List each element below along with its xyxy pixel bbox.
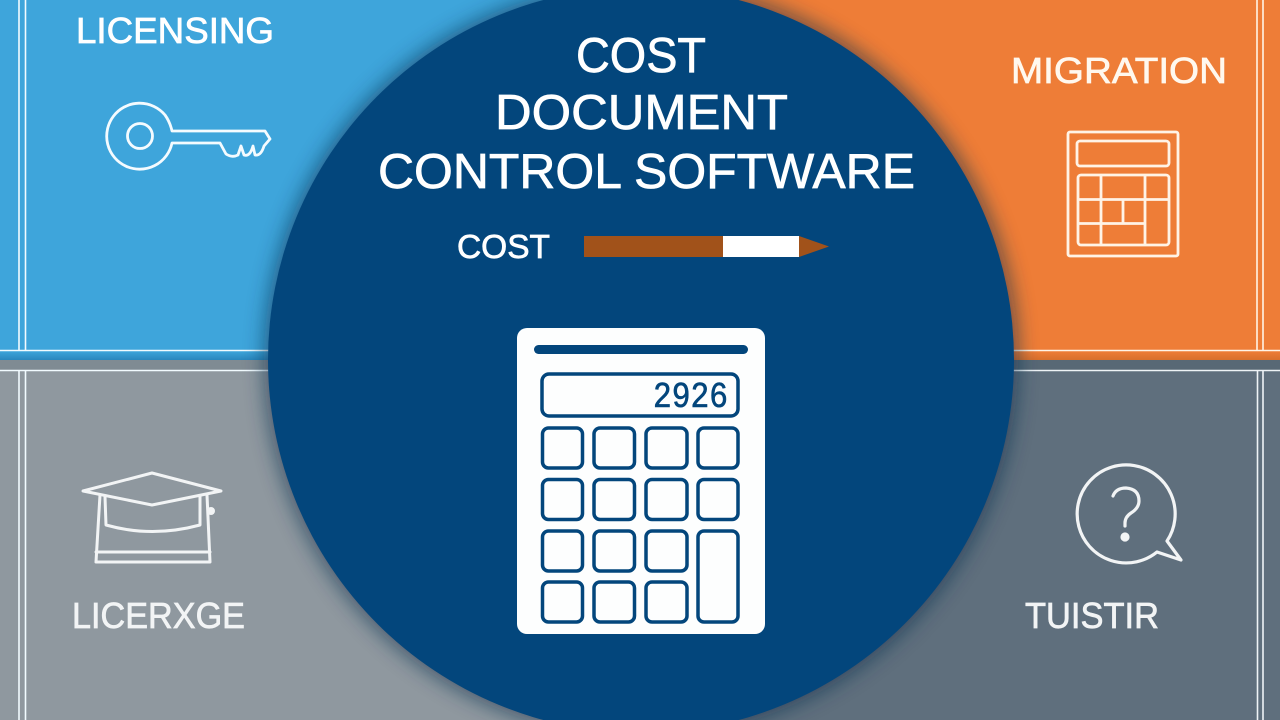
panel: migration (top right, orange) — [641, 0, 1280, 360]
shadow under central circle — [264, 0, 1018, 720]
title: CONTROL SOFTWARE — [378, 145, 915, 199]
heading: lower-left label: LICERXGE — [72, 595, 245, 636]
central circle — [268, 0, 1014, 720]
panel: support (bottom right, slate) — [641, 360, 1280, 720]
cost label: COST — [457, 228, 550, 265]
calculator display number: 2926 — [653, 377, 728, 418]
title — [378, 29, 915, 199]
heading: lower-right label: TUISTIR — [1025, 595, 1159, 636]
icon: calculator — [517, 328, 765, 634]
pencil bar — [584, 236, 829, 257]
title: DOCUMENT — [495, 86, 788, 140]
panel: licensing (top left, blue) — [0, 0, 641, 360]
heading: licensing: LICENSING — [76, 10, 274, 51]
title: COST — [576, 29, 706, 83]
icon: key — [107, 103, 270, 169]
cost meter — [457, 228, 829, 265]
icon: question bubble — [1077, 465, 1181, 563]
icon: graduation cap — [83, 473, 221, 562]
icon: spreadsheet — [1068, 132, 1178, 256]
heading: migration: MIGRATION — [1011, 50, 1227, 91]
panel: licensing lower (bottom left, grey) — [0, 360, 641, 720]
